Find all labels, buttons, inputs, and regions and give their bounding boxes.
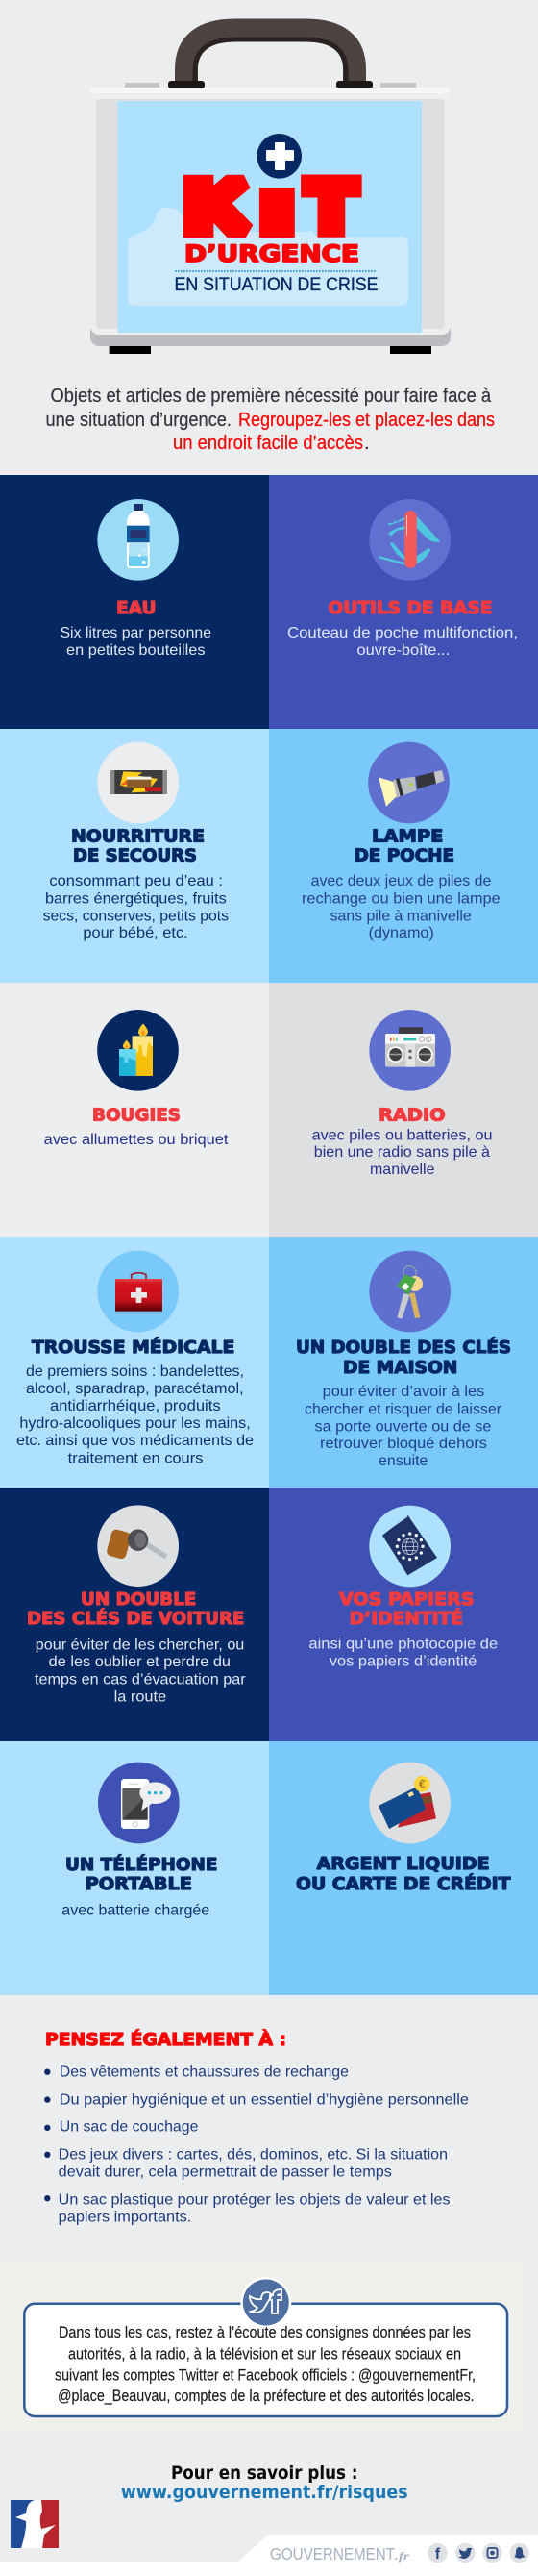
- text block: antidiarrhéique, produits: [50, 1398, 221, 1414]
- text block: pour éviter d’avoir à les: [323, 1384, 484, 1400]
- icon: credit cards and coin: [369, 1763, 451, 1843]
- icon: smartphone: [98, 1763, 180, 1843]
- text block: autorités, à la radio, à la télévision et sur les réseaux sociaux en: [68, 2346, 461, 2363]
- bullet list: Des vêtements et chaussures de rechange: [60, 2063, 349, 2081]
- heading: EAU: [116, 598, 156, 618]
- text block: Six litres par personne: [60, 625, 211, 641]
- text block: ainsi qu’une photocopie de: [308, 1636, 498, 1652]
- panel: argent liquide ou carte de crédit: [269, 1741, 538, 1995]
- icon: credit cards and coin: €: [419, 1778, 426, 1791]
- panel: double des clés de maison: [269, 1237, 538, 1488]
- heading: NOURRITURE: [71, 827, 205, 847]
- heading: LAMPE: [372, 827, 443, 847]
- bullet list: Des jeux divers : cartes, dés, dominos, etc. Si la situation: [59, 2146, 448, 2163]
- panel: trousse médicale: [0, 1237, 269, 1488]
- illustration: first-aid case with title: [90, 31, 451, 354]
- icons: social networks: [428, 2543, 529, 2563]
- intro text: Regroupez-les et placez-les dans: [238, 410, 495, 431]
- text block: [308, 1636, 498, 1669]
- text block: retrouver bloqué dehors: [320, 1436, 487, 1452]
- title: KIT: K: [187, 169, 247, 245]
- text block: [16, 1363, 254, 1466]
- text block: chercher et risquer de laisser: [305, 1401, 502, 1417]
- text block: [60, 625, 211, 659]
- heading: D’IDENTITÉ: [350, 1608, 463, 1629]
- icon: twitter and facebook badge: [240, 2277, 291, 2328]
- text block: sa porte ouverte ou de se: [315, 1418, 492, 1435]
- heading: [71, 827, 205, 866]
- text block: traitement en cours: [68, 1450, 203, 1466]
- text block: avec allumettes ou briquet: [44, 1132, 229, 1148]
- text block: [305, 1384, 502, 1469]
- title: KIT: I: [266, 186, 288, 241]
- heading: [296, 1854, 511, 1894]
- icon: house keys: [369, 1251, 451, 1332]
- heading: UN TÉLÉPHONE: [65, 1854, 217, 1875]
- title label background: [128, 208, 408, 306]
- text block: pour bébé, etc.: [83, 925, 188, 941]
- icon: energy bar: [97, 742, 179, 823]
- text block: manivelle: [370, 1162, 435, 1178]
- text block: ouvre-boîte...: [357, 642, 450, 659]
- icon: car keys: [97, 1505, 179, 1587]
- text block: etc. ainsi que vos médicaments de: [16, 1433, 254, 1449]
- text block: avec piles ou batteries, ou: [312, 1127, 492, 1143]
- heading: [65, 1854, 217, 1894]
- heading: OU CARTE DE CRÉDIT: [296, 1873, 511, 1894]
- heading: [355, 827, 454, 866]
- heading: DE SECOURS: [73, 846, 197, 866]
- title: KIT: T: [308, 169, 355, 245]
- text block: consommant peu d’eau :: [49, 873, 223, 889]
- panel: téléphone portable: [0, 1741, 269, 1995]
- heading: VOS PAPIERS: [339, 1589, 475, 1610]
- heading: [296, 1337, 511, 1378]
- icon: medical kit: [97, 1251, 179, 1332]
- heading: PENSEZ ÉGALEMENT À :: [45, 2029, 286, 2050]
- intro text: Objets et articles de première nécessité pour faire face à: [50, 386, 492, 407]
- icon: candles: [97, 1010, 179, 1091]
- icon: passport: [369, 1506, 451, 1587]
- text block: alcool, sparadrap, paracétamol,: [26, 1381, 244, 1397]
- heading: RADIO: [379, 1106, 446, 1126]
- text block: (dynamo): [369, 925, 434, 941]
- case handle: [125, 31, 416, 88]
- bullet list: devait durer, cela permettrait de passer le temps: [59, 2163, 392, 2180]
- bullet list: Du papier hygiénique et un essentiel d’hygiène personnelle: [60, 2091, 469, 2108]
- link: pour en savoir plus: Pour en savoir plus :: [171, 2463, 357, 2484]
- intro text: une situation d’urgence.: [46, 410, 232, 431]
- panel: eau: [0, 475, 269, 729]
- text block: Dans tous les cas, restez à l’écoute des consignes données par les: [59, 2324, 471, 2341]
- text block: avec batterie chargée: [61, 1902, 209, 1919]
- text block: de les oublier et perdre du: [49, 1654, 231, 1670]
- icon: cross badge: [257, 134, 302, 179]
- heading: OUTILS DE BASE: [329, 598, 492, 618]
- text block: secs, conserves, petits pots: [43, 908, 229, 924]
- text block: la route: [114, 1688, 166, 1705]
- link: pour en savoir plus: [121, 2463, 408, 2503]
- text block: Couteau de poche multifonction,: [287, 625, 518, 641]
- bullet list: [44, 2063, 469, 2226]
- intro text: un endroit facile d’accès: [173, 433, 363, 454]
- icon: radio: [369, 1010, 451, 1091]
- heading: UN DOUBLE: [81, 1589, 196, 1610]
- icon: pocket knife: [369, 499, 451, 581]
- panel: outils de base: [269, 475, 538, 729]
- heading: ARGENT LIQUIDE: [317, 1854, 490, 1874]
- panel: bougies: [0, 983, 269, 1237]
- intro text: .: [364, 433, 370, 454]
- callout: social media advice: [0, 2261, 525, 2433]
- footer: gouvernement.fr wordmark: GOUVERNEMENT: [270, 2544, 395, 2563]
- panel: radio: [269, 983, 538, 1237]
- case body: [90, 88, 451, 354]
- bullet list: papiers importants.: [59, 2210, 191, 2226]
- panel: lampe de poche: [269, 729, 538, 983]
- panel: nourriture de secours: [0, 729, 269, 983]
- icon: water bottle: [97, 499, 179, 581]
- dotted rule: [175, 270, 377, 272]
- bullet list: Un sac de couchage: [60, 2118, 199, 2135]
- bullet list: Un sac plastique pour protéger les objets de valeur et les: [59, 2192, 451, 2208]
- logo: Marianne: [11, 2500, 59, 2548]
- text block: hydro-alcooliques pour les mains,: [19, 1415, 251, 1432]
- text block: barres énergétiques, fruits: [45, 890, 227, 907]
- heading: DE POCHE: [355, 846, 454, 866]
- heading: [339, 1589, 475, 1629]
- title: D'URGENCE: D’URGENCE: [184, 240, 359, 267]
- text block: [302, 873, 501, 941]
- text block: avec deux jeux de piles de: [311, 873, 491, 889]
- heading: BOUGIES: [92, 1106, 181, 1126]
- text block: [35, 1637, 246, 1705]
- heading: DES CLÉS DE VOITURE: [27, 1608, 244, 1629]
- text block: [55, 2324, 476, 2405]
- text block: suivant les comptes Twitter et Facebook officiels : @gouvernementFr,: [55, 2366, 476, 2384]
- text block: @place_Beauvau, comptes de la préfecture et des autorités locales.: [58, 2388, 475, 2405]
- text block: vos papiers d’identité: [330, 1654, 477, 1669]
- text block: temps en cas d’évacuation par: [35, 1671, 246, 1688]
- link: pour en savoir plus: www.gouvernement.fr/risques: [121, 2482, 408, 2503]
- footer: gouvernement.fr wordmark: .fr: [395, 2549, 409, 2563]
- intro text: [46, 386, 495, 454]
- heading: PORTABLE: [86, 1874, 192, 1894]
- text block: ensuite: [379, 1453, 428, 1469]
- panel: double des clés de voiture: [0, 1488, 269, 1741]
- section: pensez également à: [44, 2029, 469, 2226]
- subtitle: EN SITUATION DE CRISE: [175, 275, 379, 295]
- icon: flashlight: [368, 742, 450, 823]
- heading: [27, 1589, 244, 1629]
- text block: pour éviter de les chercher, ou: [36, 1637, 244, 1653]
- text block: [312, 1127, 492, 1178]
- icons: social networks: f: [435, 2546, 441, 2563]
- heading: UN DOUBLE DES CLÉS: [296, 1337, 511, 1358]
- panel: papiers d'identité: [269, 1488, 538, 1741]
- text block: de premiers soins : bandelettes,: [26, 1363, 244, 1380]
- text block: [43, 873, 229, 941]
- heading: DE MAISON: [343, 1358, 457, 1378]
- text block: en petites bouteilles: [66, 642, 206, 659]
- footer band: [0, 2535, 538, 2576]
- title: KIT: [187, 169, 355, 245]
- heading: TROUSSE MÉDICALE: [32, 1337, 234, 1358]
- text block: rechange ou bien une lampe: [302, 890, 501, 907]
- text block: bien une radio sans pile à: [314, 1144, 490, 1161]
- text block: [287, 625, 518, 659]
- text block: sans pile à manivelle: [330, 908, 472, 924]
